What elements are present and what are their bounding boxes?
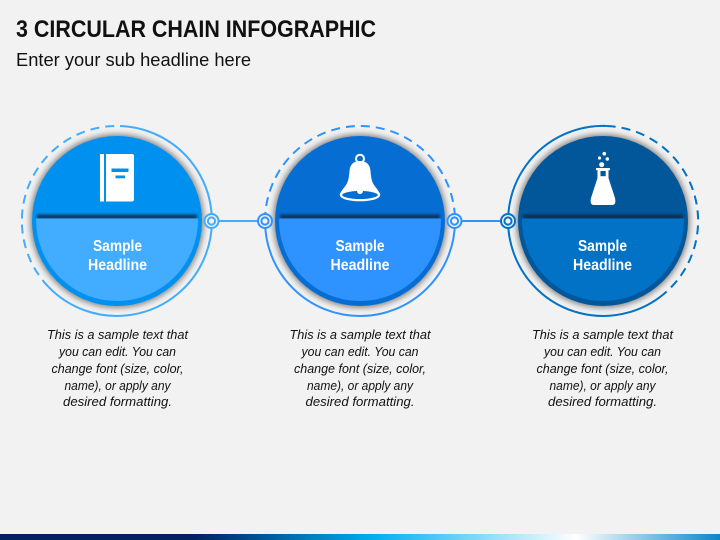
text block 1: name), or apply any <box>64 378 172 393</box>
text block 3 <box>532 327 673 409</box>
headline 2: Sample <box>336 238 385 255</box>
text block 3: This is a sample text that <box>532 327 673 342</box>
text block 1: desired formatting. <box>63 394 172 409</box>
icon: flask <box>591 152 615 205</box>
disc shadow 3 <box>516 134 690 308</box>
connector line 1 <box>218 220 259 222</box>
panel: circle 2 <box>265 126 455 316</box>
headline 3: Headline <box>573 257 632 274</box>
lower half 3 <box>522 214 684 302</box>
disc shadow 2 <box>273 134 447 308</box>
headline 3 <box>573 238 632 274</box>
text block 3: name), or apply any <box>550 378 657 393</box>
outer ring 1 <box>22 126 212 316</box>
outer ring 2 <box>265 126 455 316</box>
text block 1: This is a sample text that <box>47 327 188 342</box>
headline 1 <box>88 238 147 274</box>
text block 1 <box>47 327 188 409</box>
disc 2 <box>275 136 445 306</box>
outer ring 3 <box>508 126 698 316</box>
text block 2: desired formatting. <box>306 394 414 409</box>
lower half 2 <box>279 214 441 302</box>
headline 1: Sample <box>93 238 142 255</box>
connector node 3 <box>448 214 462 228</box>
connector node 1 <box>204 214 218 228</box>
text block 2: you can edit. You can <box>301 344 418 359</box>
text block 3: desired formatting. <box>548 394 657 409</box>
panel: circle 3 <box>508 126 698 316</box>
disc shadow 1 <box>30 134 204 308</box>
connector node 2 <box>258 214 272 228</box>
text block 2: change font (size, color, <box>294 361 426 376</box>
title: 3 CIRCULAR CHAIN INFOGRAPHIC <box>16 16 376 43</box>
subtitle: Enter your sub headline here <box>16 50 251 70</box>
connector node 4 <box>501 214 515 228</box>
icon: book <box>100 154 134 202</box>
disc 3 <box>518 136 688 306</box>
text block 2 <box>290 327 431 409</box>
text block 2: This is a sample text that <box>290 327 431 342</box>
text block 1: change font (size, color, <box>52 361 184 376</box>
text block 1: you can edit. You can <box>58 344 176 359</box>
headline 2: Headline <box>330 257 390 274</box>
text block 3: change font (size, color, <box>536 361 668 376</box>
text block 3: you can edit. You can <box>543 344 661 359</box>
headline 1: Headline <box>88 257 147 274</box>
panel: circle 1 <box>22 126 212 316</box>
text block 2: name), or apply any <box>307 378 414 393</box>
disc 1 <box>32 136 202 306</box>
bottom gradient bar <box>0 534 720 540</box>
connector line 2 <box>461 220 502 222</box>
headline 2 <box>330 238 390 274</box>
lower half 1 <box>36 214 198 302</box>
icon: bell <box>340 155 380 200</box>
headline 3: Sample <box>578 238 627 255</box>
